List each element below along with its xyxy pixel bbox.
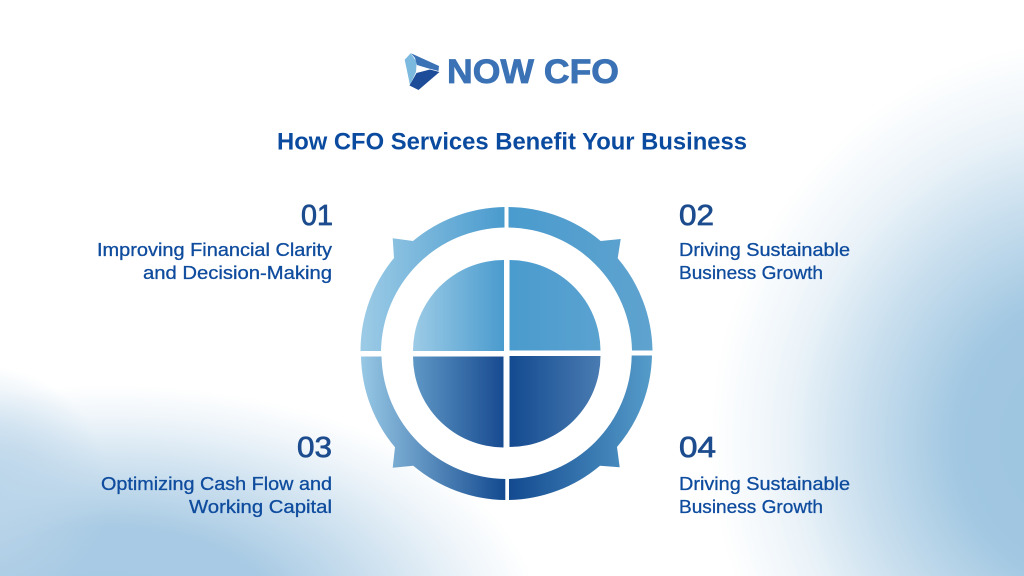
block 04: driving sustainable business growth: 04 [679,432,716,464]
disc quadrant bottom-left [413,356,504,448]
block 04: driving sustainable business growth: Business Growth [679,497,823,517]
block 03: optimizing cash flow [101,432,332,517]
disc quadrant top-left [413,260,504,351]
block 03: optimizing cash flow: 03 [297,432,332,464]
block 01: improving financial clarity: Improving Financial Clarity [97,240,332,260]
block 01: improving financial clarity [97,200,333,283]
title: How CFO Services Benefit Your Business [277,128,747,156]
ring segment top-left with arrow [360,207,504,351]
block 03: optimizing cash flow: Optimizing Cash Flow and [101,474,332,494]
block 01: improving financial clarity: and Decision-Making [143,263,332,283]
logo wordmark: NOW CFO [447,53,619,91]
ring segment top-right with arrow [508,207,652,350]
logo icon [405,53,440,90]
block 02: driving sustainable business growth [679,200,850,283]
block 02: driving sustainable business growth: Business Growth [679,263,823,283]
logo: NOW CFO [405,53,619,91]
circular diagram [360,207,652,500]
block 02: driving sustainable business growth: Driving Sustainable [679,240,850,260]
block 02: driving sustainable business growth: 02 [679,200,714,232]
block 01: improving financial clarity: 01 [301,200,333,232]
block 04: driving sustainable business growth: Driving Sustainable [679,474,850,494]
ring segment bottom-right with arrow [509,356,652,500]
block 03: optimizing cash flow: Working Capital [189,497,332,517]
disc quadrant bottom-right [510,356,600,447]
disc quadrant top-right [510,260,600,350]
ring segment bottom-left with arrow [361,356,505,500]
block 04: driving sustainable business growth [679,432,850,517]
